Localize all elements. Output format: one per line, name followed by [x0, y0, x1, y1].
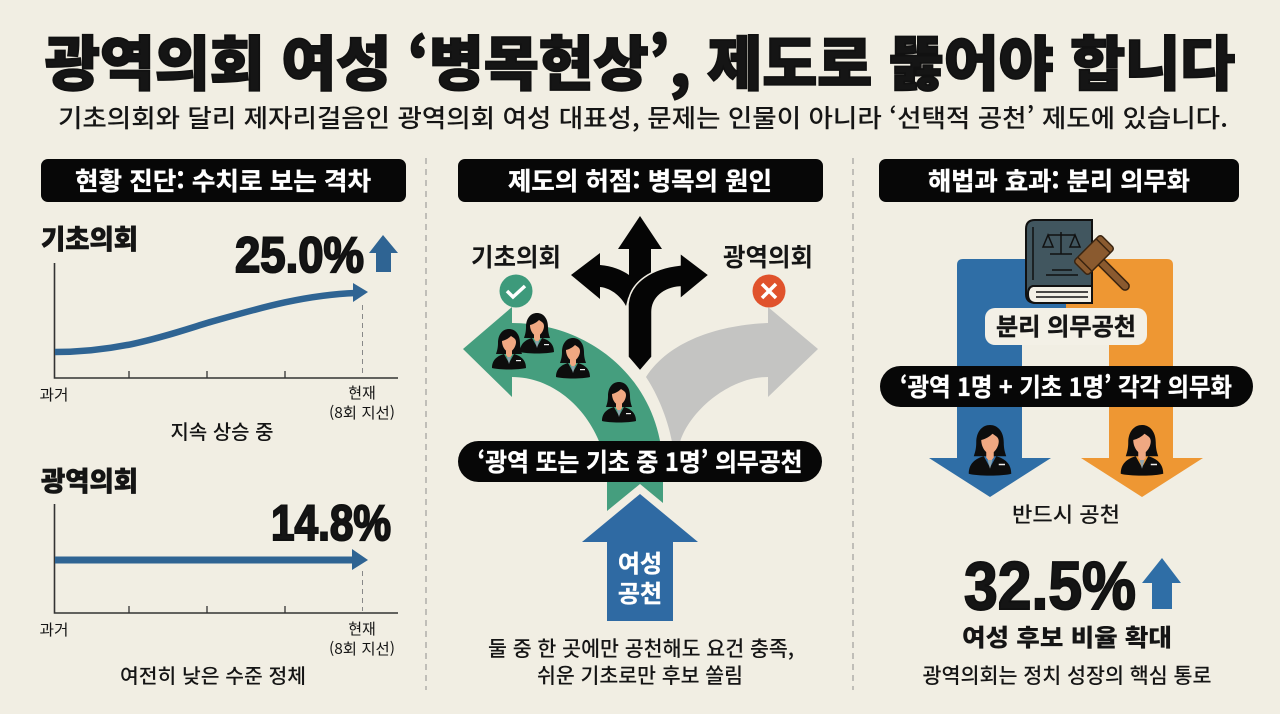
chart: metropolitan councils: 광역의회 — [41, 460, 138, 499]
text: cause explanation — [488, 633, 794, 690]
text: cause explanation: 둘 중 한 곳에만 공천해도 요건 충족, — [488, 633, 794, 663]
icon: woman candidate blue — [969, 425, 1011, 476]
heading: solution: 해법과 효과: 분리 의무화 — [928, 162, 1190, 198]
chart: local councils: 현재 — [348, 382, 376, 403]
callout: one-of-either rule: ‘광역 또는 기초 중 1명’ 의무공천 — [478, 443, 802, 479]
label: separate mandatory nomination: 분리 의무공천 — [996, 307, 1136, 342]
arrow: green path to local — [463, 307, 663, 511]
text: cause explanation: 쉬운 기초로만 후보 쏠림 — [537, 660, 743, 690]
arrow: orange local path — [1066, 259, 1203, 497]
chart: metropolitan councils: (8회 지선) — [329, 638, 395, 659]
arrow: blue metropolitan path — [929, 259, 1066, 497]
text: core route: 광역의회는 정치 성장의 핵심 통로 — [922, 660, 1212, 690]
title: 광역의회 여성 ‘병목현상’, 제도로 뚫어야 합니다 — [45, 17, 1235, 102]
label: local councils with check — [471, 238, 561, 308]
chart: local councils: 기초의회 — [41, 218, 138, 257]
icon: law book — [1026, 220, 1092, 303]
stat: 32.5 percent: 32.5% — [964, 548, 1136, 624]
arrow: women nomination: 여성 — [618, 544, 662, 579]
arrow: gray path to metropolitan — [646, 307, 818, 442]
label: local councils with check: 기초의회 — [471, 238, 561, 274]
heading: current diagnosis: 현황 진단: 수치로 보는 격차 — [75, 162, 371, 198]
panel: solution — [879, 159, 1253, 690]
chart: metropolitan councils: 과거 — [40, 619, 68, 640]
heading: loophole — [458, 159, 823, 202]
label: metropolitan councils with cross: 광역의회 — [723, 238, 813, 274]
chart: local councils — [40, 218, 398, 445]
subtitle: 기초의회와 달리 제자리걸음인 광역의회 여성 대표성, 문제는 인물이 아니라 ‘선택적 공천’ 제도에 있습니다. — [58, 99, 1228, 135]
chart: local councils: (8회 지선) — [329, 402, 395, 423]
arrow: women nomination: 공천 — [618, 574, 662, 609]
arrow: women nomination — [582, 494, 698, 621]
icon: gavel — [1073, 234, 1141, 302]
text: expand women candidate ratio: 여성 후보 비율 확대 — [962, 618, 1172, 653]
icons: women candidates on green path — [492, 313, 636, 422]
chart: local councils: 지속 상승 중 — [170, 416, 274, 445]
chart: local councils: 25.0% — [235, 227, 364, 283]
panel: loophole — [458, 159, 823, 690]
chart: metropolitan councils: 14.8% — [271, 495, 391, 551]
chart: metropolitan councils — [40, 460, 398, 689]
heading: current diagnosis — [41, 159, 406, 202]
heading: loophole: 제도의 허점: 병목의 원인 — [508, 162, 772, 198]
panel: current diagnosis — [40, 159, 406, 689]
arrow: black three-way fork — [571, 216, 709, 371]
label: metropolitan councils with cross — [723, 238, 813, 308]
heading: solution — [879, 159, 1239, 202]
chart: local councils: 과거 — [40, 384, 68, 405]
chart: metropolitan councils: 현재 — [348, 618, 376, 639]
chart: metropolitan councils: 여전히 낮은 수준 정체 — [120, 660, 306, 689]
text: must nominate: 반드시 공천 — [1012, 499, 1120, 529]
callout: one each rule: ‘광역 1명 + 기초 1명’ 각각 의무화 — [900, 368, 1232, 404]
icon: woman candidate orange — [1121, 425, 1163, 476]
